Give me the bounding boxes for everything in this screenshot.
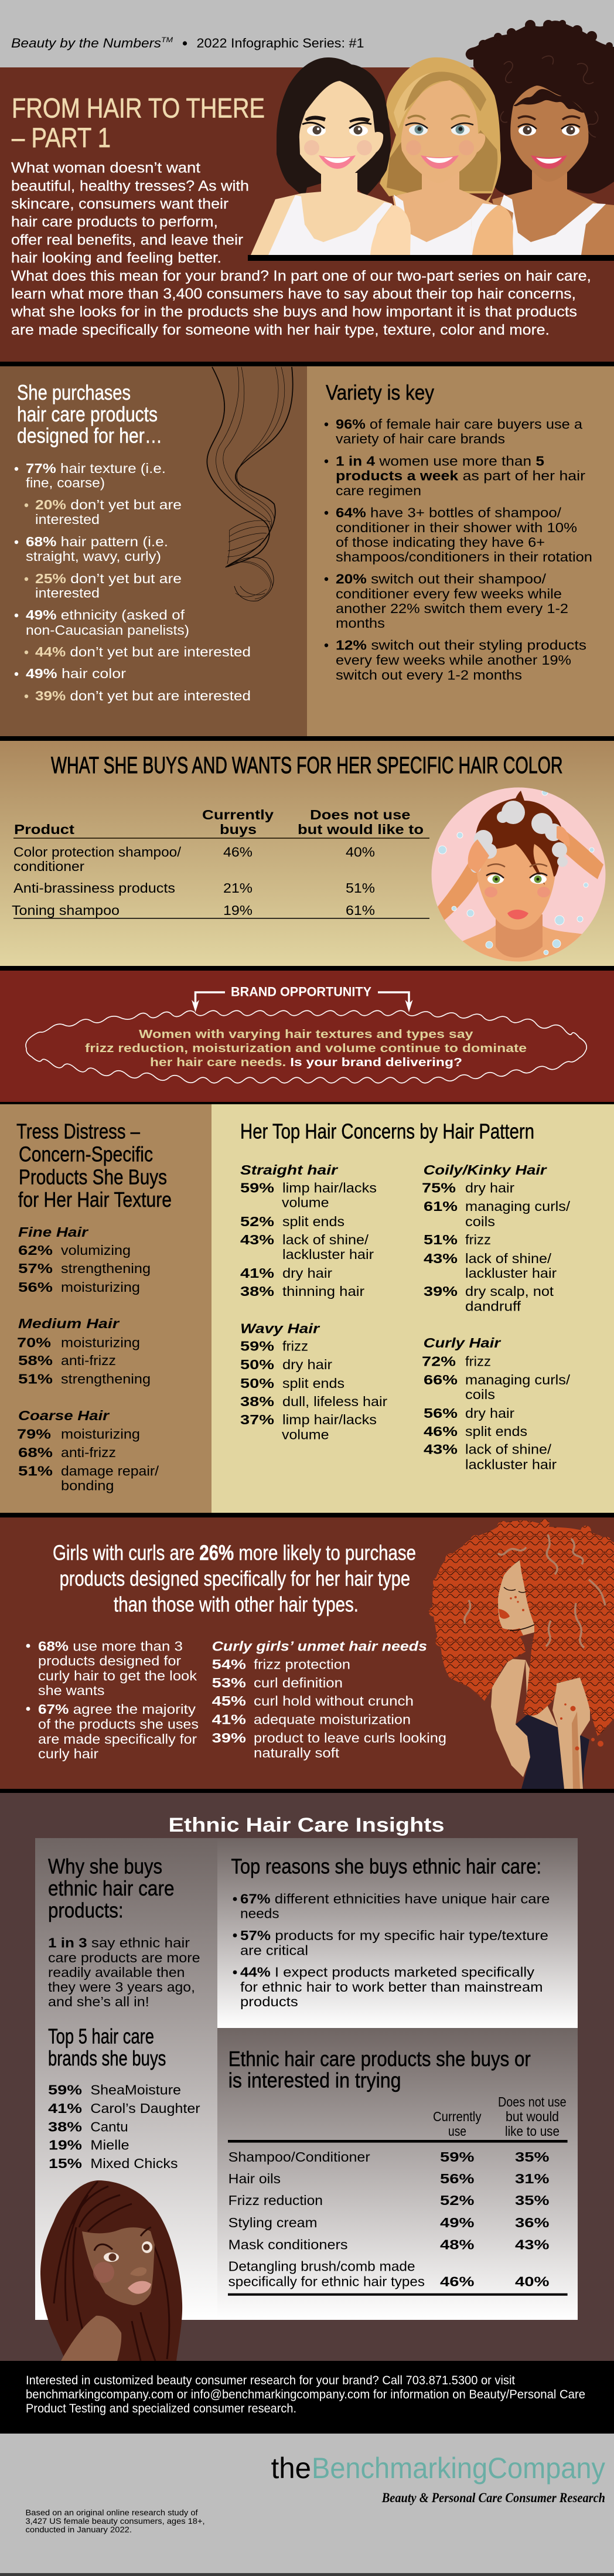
variety list xyxy=(325,416,592,683)
medium hair list: moisturizing xyxy=(61,1335,140,1350)
source note: 3,427 US female beauty consumers, ages 18+, xyxy=(26,2516,205,2526)
sub-panel: top reasons: 57% products for my specific hair type/texture xyxy=(240,1928,548,1943)
purchase list: interested xyxy=(35,586,100,601)
footer cta band: benchmarkingcompany.com or info@benchmarkingcompany.com for information on Beauty/Personal Care xyxy=(26,2388,585,2401)
purchase list: 49% hair color xyxy=(26,666,126,681)
variety list: products a week as part of her hair xyxy=(336,468,585,484)
sub-panel: products she buys table: Does not use xyxy=(498,2094,567,2109)
medium hair list xyxy=(17,1316,151,1387)
panel: ethnic hair care insights xyxy=(0,1793,614,2361)
headline: than those with other hair types. xyxy=(114,1592,359,1617)
variety list: 20% switch out their shampoo/ xyxy=(336,571,547,586)
curly hair list: coils xyxy=(465,1387,495,1402)
logo: the xyxy=(271,2452,311,2485)
unmet needs list: 41% xyxy=(212,1712,246,1727)
curly hair list: Curly Hair xyxy=(424,1335,501,1350)
unmet needs list: 53% xyxy=(212,1675,246,1690)
page background: header grey band xyxy=(0,0,614,67)
unmet needs list: naturally soft xyxy=(254,1745,340,1761)
source note: Based on an original online research study of xyxy=(26,2508,198,2517)
sub-panel: top reasons: Top reasons she buys ethnic hair care: xyxy=(231,1854,541,1879)
arrow: left xyxy=(192,992,225,1012)
curly hair list xyxy=(422,1335,571,1472)
series line: Beauty by the Numbers xyxy=(11,36,161,50)
wavy hair list: dry hair xyxy=(282,1357,332,1372)
series line: TM xyxy=(161,36,173,44)
source note xyxy=(26,2508,205,2534)
sub-panel: why she buys: Why she buys xyxy=(48,1854,162,1879)
curly hair list: 46% xyxy=(424,1424,458,1439)
sub-panel: why she buys: ethnic hair care xyxy=(48,1876,175,1900)
variety list: switch out every 1-2 months xyxy=(336,668,522,683)
sub-panel: top reasons xyxy=(217,1838,578,2028)
heading: Tress Distress – xyxy=(16,1119,140,1144)
coarse hair list: 79% xyxy=(17,1427,51,1442)
woman 3 face xyxy=(510,86,589,182)
curly hair bullets: 67% agree the majority xyxy=(38,1702,196,1717)
sub-panel: why she buys: 59% xyxy=(48,2082,82,2098)
fine hair list: 62% xyxy=(18,1243,53,1258)
sub-panel: products she buys table: use xyxy=(448,2124,466,2139)
coily hair list: lackluster hair xyxy=(465,1265,557,1281)
variety list: conditioner in their shower with 10% xyxy=(336,520,577,535)
hair color table: Anti-brassiness products xyxy=(13,880,175,896)
source note: conducted in January 2022. xyxy=(26,2525,132,2534)
sub-panel: products she buys table: like to use xyxy=(505,2124,560,2139)
panel: variety is key xyxy=(307,366,614,736)
sub-panel: products she buys table: Styling cream xyxy=(228,2215,318,2230)
heading: Her Top Hair Concerns by Hair Pattern xyxy=(240,1119,534,1144)
heading: Ethnic Hair Care Insights xyxy=(169,1814,444,1836)
sub-panel: why she buys: Cantu xyxy=(90,2119,128,2135)
coarse hair list: bonding xyxy=(61,1478,114,1493)
wavy hair list: Wavy Hair xyxy=(240,1321,320,1336)
headline: products designed specifically for her hair type xyxy=(60,1567,410,1591)
purchase list: non-Caucasian panelists) xyxy=(26,622,189,638)
panel: she purchases xyxy=(0,366,307,736)
curly hair list: managing curls/ xyxy=(465,1372,571,1387)
sub-panel: products she buys table xyxy=(217,2028,578,2320)
wavy hair list: 38% xyxy=(240,1394,274,1409)
unmet needs list: 54% xyxy=(212,1657,246,1672)
intro text: are made specifically for someone with her hair type, texture, color and more. xyxy=(11,322,550,338)
hair color table: Does not use xyxy=(310,807,410,822)
straight hair list: lackluster hair xyxy=(282,1247,374,1262)
sub-panel: why she buys: 15% xyxy=(49,2156,82,2171)
curly hair bullets xyxy=(26,1639,199,1761)
curly hair list: lack of shine/ xyxy=(465,1442,552,1457)
sub-panel: why she buys: 38% xyxy=(48,2119,82,2135)
variety list: of those indicating they have 6+ xyxy=(336,535,545,550)
panel: brand opportunity xyxy=(0,971,614,1104)
medium hair list: 58% xyxy=(18,1353,53,1368)
hair color table: Color protection shampoo/ xyxy=(13,844,182,859)
footer cta band xyxy=(0,2361,614,2434)
sub-panel: products she buys table: 52% xyxy=(440,2193,475,2208)
medium hair list: anti-frizz xyxy=(61,1353,116,1368)
sub-panel: why she buys: Top 5 hair care xyxy=(48,2024,154,2048)
bar under illustration xyxy=(248,255,614,261)
sub-panel: products she buys table: 56% xyxy=(440,2171,475,2186)
wavy hair list: 50% xyxy=(240,1376,274,1391)
hair color table: 40% xyxy=(346,844,375,859)
curly hair bullets: curly hair xyxy=(38,1746,98,1761)
panel: hair concerns by pattern xyxy=(212,1104,614,1513)
wavy hair list xyxy=(240,1321,387,1442)
curly hair list: split ends xyxy=(465,1424,527,1439)
purchase list: interested xyxy=(35,512,100,527)
sub-panel: top reasons: are critical xyxy=(240,1943,308,1958)
sub-panel: products she buys table: Currently xyxy=(433,2109,482,2124)
coarse hair list: anti-frizz xyxy=(61,1445,116,1460)
sub-panel: products she buys table: 49% xyxy=(440,2215,475,2230)
coarse hair list: damage repair/ xyxy=(61,1463,159,1478)
heading xyxy=(16,1119,172,1212)
sub-panel: products she buys table: 35% xyxy=(515,2193,550,2208)
title xyxy=(12,93,265,153)
intro text: hair care products to perform, xyxy=(11,214,218,230)
straight hair list: thinning hair xyxy=(282,1284,364,1299)
hair color table: Product xyxy=(14,822,74,837)
heading xyxy=(17,380,162,448)
heading: Products She Buys xyxy=(19,1165,167,1189)
callout text xyxy=(85,1028,527,1069)
unmet needs list xyxy=(212,1639,446,1761)
sub-panel: products she buys table: Hair oils xyxy=(228,2171,281,2186)
panel: intro xyxy=(0,67,614,366)
sub-panel: products she buys table: Frizz reduction xyxy=(228,2193,323,2208)
headline xyxy=(53,1541,416,1617)
coarse hair list xyxy=(17,1408,159,1493)
footer cta band: Product Testing and specialized consumer research. xyxy=(26,2402,296,2415)
sub-panel: products she buys table: 40% xyxy=(515,2274,550,2289)
purchase list: 20% don’t yet but are xyxy=(35,497,182,512)
footer: logo and source xyxy=(0,2434,614,2576)
intro text: what she looks for in the products she buys and how important it is that products xyxy=(11,304,577,320)
woman 1 dark hair xyxy=(277,57,391,198)
sub-panel: top reasons: products xyxy=(240,1994,298,2009)
curly hair list: 72% xyxy=(422,1354,456,1369)
coily hair list: 43% xyxy=(424,1251,458,1266)
sub-panel: why she buys: Mielle xyxy=(90,2138,129,2153)
sub-panel: products she buys table: 48% xyxy=(440,2237,475,2252)
hair color table: but would like to xyxy=(298,822,424,837)
intro text: learn what more than 3,400 consumers have to say about their top hair concerns, xyxy=(11,286,576,302)
straight hair list: dry hair xyxy=(282,1265,332,1281)
curly hair list: 43% xyxy=(424,1442,458,1457)
hair color table: Currently xyxy=(202,807,274,822)
sub-panel: products she buys table: Shampoo/Conditioner xyxy=(228,2149,370,2165)
sub-panel: why she buys: and she’s all in! xyxy=(48,1994,149,2009)
curly hair list: frizz xyxy=(465,1354,491,1369)
wavy hair list: 59% xyxy=(240,1339,274,1354)
callout text: frizz reduction, moisturization and volume continue to dominate xyxy=(85,1042,527,1055)
coarse hair list: moisturizing xyxy=(61,1427,140,1442)
fine hair list: 56% xyxy=(18,1280,53,1295)
intro text: What woman doesn’t want xyxy=(11,160,200,176)
woman 2 face xyxy=(401,80,485,183)
coarse hair list: Coarse Hair xyxy=(18,1408,110,1423)
sub-panel: why she buys: they were 3 years ago, xyxy=(48,1979,195,1995)
sub-panel: why she buys: readily available then xyxy=(48,1965,185,1980)
sub-panel: products she buys table: 46% xyxy=(440,2274,475,2289)
curly hair bullets: products designed for xyxy=(38,1653,181,1669)
curly hair bullets: curly hair to get the look xyxy=(38,1668,197,1683)
sub-panel: why she buys: care products are more xyxy=(48,1950,200,1965)
title: FROM HAIR TO THERE xyxy=(12,93,265,123)
sub-panel: why she buys: products: xyxy=(48,1898,124,1922)
illustration: three women xyxy=(248,20,614,261)
curly hair bullets: of the products she uses xyxy=(38,1717,199,1732)
unmet needs list: curl definition xyxy=(254,1675,343,1690)
heading: Variety is key xyxy=(326,380,434,404)
medium hair list: Medium Hair xyxy=(18,1316,120,1331)
straight hair list: 59% xyxy=(240,1180,274,1196)
curly hair bullets: are made specifically for xyxy=(38,1731,197,1747)
intro text: offer real benefits, and leave their xyxy=(11,232,243,249)
heading: for Her Hair Texture xyxy=(18,1187,172,1212)
sub-panel: products she buys table: 31% xyxy=(515,2171,550,2186)
purchase list xyxy=(15,461,251,703)
unmet needs list: adequate moisturization xyxy=(254,1712,411,1727)
coily hair list: managing curls/ xyxy=(465,1199,571,1214)
wavy hair list: 37% xyxy=(240,1412,274,1427)
purchase list: straight, wavy, curly) xyxy=(26,549,161,564)
sub-panel: products she buys table: but would xyxy=(506,2109,559,2124)
coily hair list: Coily/Kinky Hair xyxy=(424,1162,547,1178)
curly hair bullets: 68% use more than 3 xyxy=(38,1639,183,1654)
fine hair list: strengthening xyxy=(61,1261,151,1276)
variety list: months xyxy=(336,615,385,631)
panel: tress distress xyxy=(0,1104,212,1513)
heading: Concern-Specific xyxy=(19,1142,153,1166)
fine hair list xyxy=(18,1224,151,1295)
coily hair list: 61% xyxy=(424,1199,458,1214)
variety list: 96% of female hair care buyers use a xyxy=(336,416,582,431)
medium hair list: strengthening xyxy=(61,1372,151,1387)
fine hair list: moisturizing xyxy=(61,1280,140,1295)
coily hair list: 39% xyxy=(424,1284,458,1299)
intro text: beautiful, healthy tresses? As with xyxy=(11,178,249,194)
woman 3 body and top xyxy=(492,170,614,255)
fine hair list: volumizing xyxy=(61,1243,131,1258)
sub-panel: products she buys table: 43% xyxy=(515,2237,550,2252)
intro text xyxy=(11,160,591,338)
straight hair list: 43% xyxy=(240,1232,274,1247)
headline: Girls with curls are 26% more likely to purchase xyxy=(53,1541,416,1565)
fine hair list: Fine Hair xyxy=(18,1224,88,1240)
purchase list: 77% hair texture (i.e. xyxy=(26,461,166,476)
heading: designed for her… xyxy=(17,423,162,448)
coily hair list: coils xyxy=(465,1214,495,1229)
coarse hair list: 51% xyxy=(18,1463,53,1478)
variety list: 1 in 4 women use more than 5 xyxy=(336,454,544,469)
unmet needs list: curl hold without crunch xyxy=(254,1693,414,1709)
variety list: another 22% switch them every 1-2 xyxy=(336,601,568,616)
sub-panel: top reasons: 67% different ethnicities have unique hair care xyxy=(240,1891,550,1907)
straight hair list: Straight hair xyxy=(240,1162,338,1178)
variety list: shampoos/conditioners in their rotation xyxy=(336,549,592,564)
coily hair list xyxy=(422,1162,571,1314)
straight hair list: lack of shine/ xyxy=(282,1232,369,1247)
straight hair list: split ends xyxy=(282,1214,344,1229)
illustration: curly red-haired woman xyxy=(429,1519,614,1789)
coily hair list: dry hair xyxy=(465,1180,514,1196)
straight hair list xyxy=(240,1162,377,1299)
purchase list: 39% don’t yet but are interested xyxy=(35,688,251,703)
title: – PART 1 xyxy=(12,122,111,153)
woman 1 body and top xyxy=(251,173,411,255)
straight hair list: 41% xyxy=(240,1265,274,1281)
variety list: 64% have 3+ bottles of shampoo/ xyxy=(336,505,562,520)
coily hair list: 51% xyxy=(424,1232,458,1247)
arrow: right xyxy=(378,992,412,1012)
hair color table: conditioner xyxy=(13,859,84,874)
intro text: What does this mean for your brand? In part one of our two-part series on hair care, xyxy=(11,268,591,284)
sub-panel: why she buys xyxy=(35,1838,217,2320)
illustration: woman with long straight hair xyxy=(40,2180,182,2361)
footer cta band: Interested in customized beauty consumer research for your brand? Call 703.871.5300 or visit xyxy=(26,2374,515,2387)
curly hair bullets: she wants xyxy=(38,1683,104,1698)
unmet needs list: frizz protection xyxy=(254,1657,350,1672)
straight hair list: limp hair/lacks xyxy=(282,1180,377,1196)
sub-panel: products she buys table: Detangling brush/comb made xyxy=(228,2259,415,2274)
intro text: hair looking and feeling better. xyxy=(11,250,221,266)
wavy hair list: limp hair/lacks xyxy=(282,1412,377,1427)
heading: hair care products xyxy=(17,402,158,426)
wavy hair list: 50% xyxy=(240,1357,274,1372)
purchase list: 25% don’t yet but are xyxy=(35,571,182,586)
variety list: care regimen xyxy=(336,483,421,498)
intro text: skincare, consumers want their xyxy=(11,196,228,212)
sub-panel: why she buys: Carol’s Daughter xyxy=(90,2101,200,2116)
wavy hair list: frizz xyxy=(282,1339,308,1354)
hair color table xyxy=(12,807,429,919)
sub-panel: products she buys table: specifically for ethnic hair types xyxy=(228,2274,425,2289)
hair color table: 61% xyxy=(346,903,375,918)
heading: BRAND OPPORTUNITY xyxy=(231,985,371,999)
straight hair list: 38% xyxy=(240,1284,274,1299)
sub-panel: top reasons: needs xyxy=(240,1906,279,1921)
hair color table: Toning shampoo xyxy=(12,903,120,918)
woman 3 curly hair xyxy=(466,20,614,195)
sub-panel: products she buys table: 35% xyxy=(515,2149,550,2165)
panel: girls with curls xyxy=(0,1513,614,1793)
purchase list: fine, coarse) xyxy=(26,475,105,490)
sub-panel: products she buys table: is interested in trying xyxy=(228,2068,401,2092)
variety list: variety of hair care brands xyxy=(336,431,505,447)
variety list: conditioner every few weeks while xyxy=(336,586,562,601)
illustration: woman shampooing xyxy=(431,787,606,967)
sub-panel: why she buys: 19% xyxy=(49,2138,82,2153)
coily hair list: dandruff xyxy=(465,1299,521,1314)
curly hair list: 66% xyxy=(424,1372,458,1387)
woman 1 face xyxy=(299,81,383,183)
purchase list: 49% ethnicity (asked of xyxy=(26,607,185,622)
sub-panel: products she buys table: Mask conditioners xyxy=(228,2237,348,2252)
sub-panel: why she buys: brands she buys xyxy=(48,2046,166,2070)
callout text: Women with varying hair textures and types say xyxy=(139,1028,474,1041)
wavy hair list: volume xyxy=(282,1427,329,1442)
hair color table: 19% xyxy=(223,903,253,918)
series line: 2022 Infographic Series: #1 xyxy=(197,36,364,50)
wavy callout outline xyxy=(26,1010,586,1083)
hair curl illustration xyxy=(207,367,293,601)
unmet needs list: product to leave curls looking xyxy=(254,1730,446,1745)
purchase list: 68% hair pattern (i.e. xyxy=(26,534,168,549)
coily hair list: lack of shine/ xyxy=(465,1251,552,1266)
sub-panel: top reasons: 44% I expect products marketed specifically xyxy=(240,1965,535,1980)
variety list: 12% switch out their styling products xyxy=(336,638,586,653)
woman 2 blonde hair xyxy=(380,57,501,249)
sub-panel: products she buys table: Ethnic hair care products she buys or xyxy=(228,2047,531,2071)
medium hair list: 51% xyxy=(18,1372,53,1387)
variety list: every few weeks while another 19% xyxy=(336,652,571,668)
unmet needs list: 39% xyxy=(212,1730,246,1745)
coarse hair list: 68% xyxy=(18,1445,53,1460)
callout text: her hair care needs. Is your brand delivering? xyxy=(150,1056,462,1069)
curly hair list: 56% xyxy=(424,1406,458,1421)
straight hair list: volume xyxy=(282,1195,329,1210)
coily hair list: 75% xyxy=(422,1180,456,1196)
unmet needs list: 45% xyxy=(212,1693,246,1709)
coily hair list: dry scalp, not xyxy=(465,1284,554,1299)
coily hair list: frizz xyxy=(465,1232,491,1247)
heading: She purchases xyxy=(17,380,131,404)
hair color table: buys xyxy=(220,822,257,837)
panel: hair color xyxy=(0,736,614,971)
sub-panel: why she buys: SheaMoisture xyxy=(90,2082,181,2098)
hair color table: 46% xyxy=(223,844,253,859)
sub-panel: products she buys table: 36% xyxy=(515,2215,550,2230)
unmet needs list: Curly girls’ unmet hair needs xyxy=(212,1639,427,1654)
fine hair list: 57% xyxy=(18,1261,53,1276)
sub-panel: why she buys: 41% xyxy=(48,2101,82,2116)
woman 2 body and top xyxy=(393,167,513,255)
sub-panel: products she buys table: 59% xyxy=(440,2149,475,2165)
straight hair list: 52% xyxy=(240,1214,274,1229)
purchase list: 44% don’t yet but are interested xyxy=(35,644,251,659)
sub-panel: why she buys: 1 in 3 say ethnic hair xyxy=(48,1935,190,1951)
curly hair list: dry hair xyxy=(465,1406,514,1421)
sub-panel: why she buys: Mixed Chicks xyxy=(90,2156,178,2171)
series line xyxy=(11,36,364,50)
wavy hair list: split ends xyxy=(282,1376,344,1391)
wavy hair list: dull, lifeless hair xyxy=(282,1394,387,1409)
curly hair list: lackluster hair xyxy=(465,1457,557,1472)
hair color table: 21% xyxy=(223,880,253,896)
hair color table: 51% xyxy=(346,880,375,896)
sub-panel: top reasons: for ethnic hair to work better than mainstream xyxy=(240,1979,543,1995)
medium hair list: 70% xyxy=(17,1335,51,1350)
